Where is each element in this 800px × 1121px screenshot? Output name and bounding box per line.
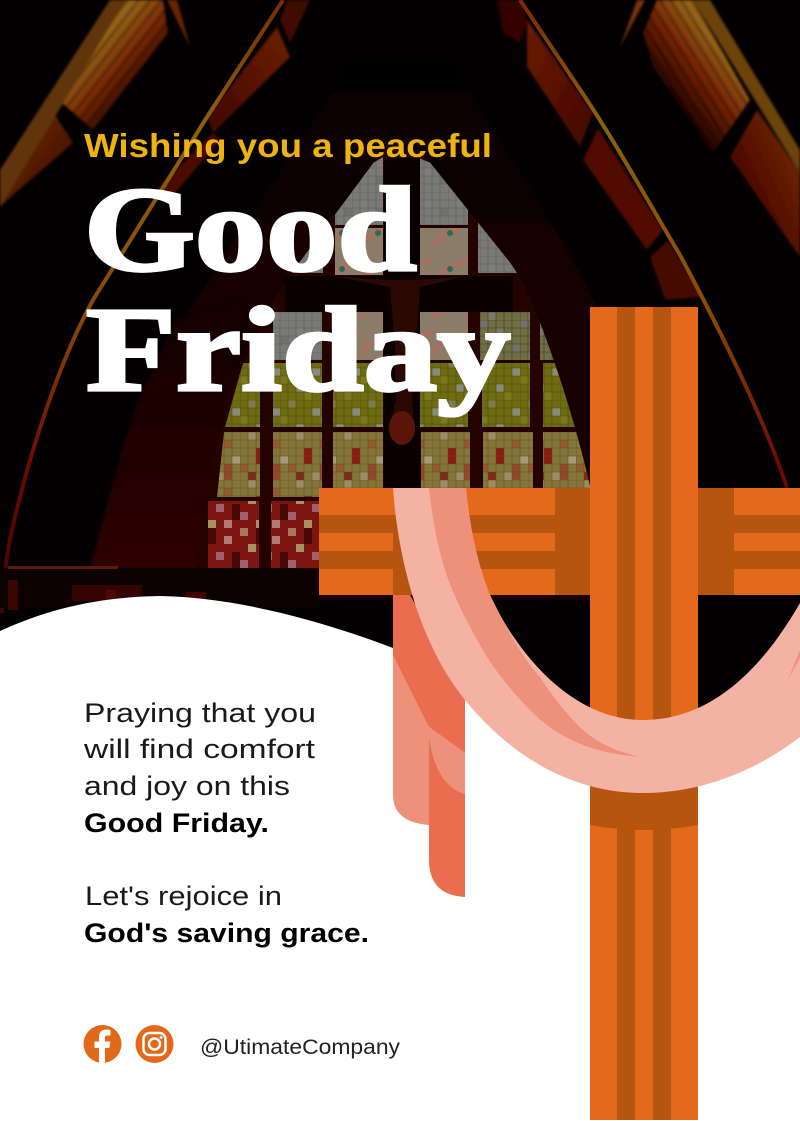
floor band	[0, 566, 320, 612]
message text block: Good Friday.	[84, 808, 269, 838]
message text block: Praying that you	[84, 698, 316, 728]
crucifix	[285, 158, 513, 488]
background photo: church interior	[0, 0, 800, 708]
social handle: @UtimateCompany	[200, 1036, 401, 1059]
left maroon curtain wall	[90, 300, 245, 568]
message text block: and joy on this	[84, 771, 290, 801]
cloth: hanging drape	[393, 595, 465, 897]
message text block: Let's rejoice in	[85, 881, 282, 911]
cross	[319, 307, 800, 1120]
cross vertical beam	[590, 307, 698, 1120]
title: Good Friday: Good	[84, 162, 417, 296]
message text block: will find comfort	[83, 734, 316, 764]
cloth: draped loop	[393, 488, 800, 793]
rafter panels	[0, 0, 800, 300]
icon: facebook	[84, 1025, 122, 1063]
window arch surround	[90, 60, 612, 600]
curved beams	[2, 0, 283, 613]
stained glass window	[196, 150, 592, 570]
message text block	[83, 698, 369, 948]
icon: instagram	[136, 1025, 174, 1063]
white wave panel	[0, 596, 800, 1121]
cross horizontal beam	[319, 488, 800, 595]
title: Good Friday: Friday	[86, 283, 511, 417]
message text block: God's saving grace.	[84, 918, 369, 948]
title: Good Friday	[84, 162, 511, 417]
subtitle: Wishing you a peaceful	[84, 127, 492, 164]
